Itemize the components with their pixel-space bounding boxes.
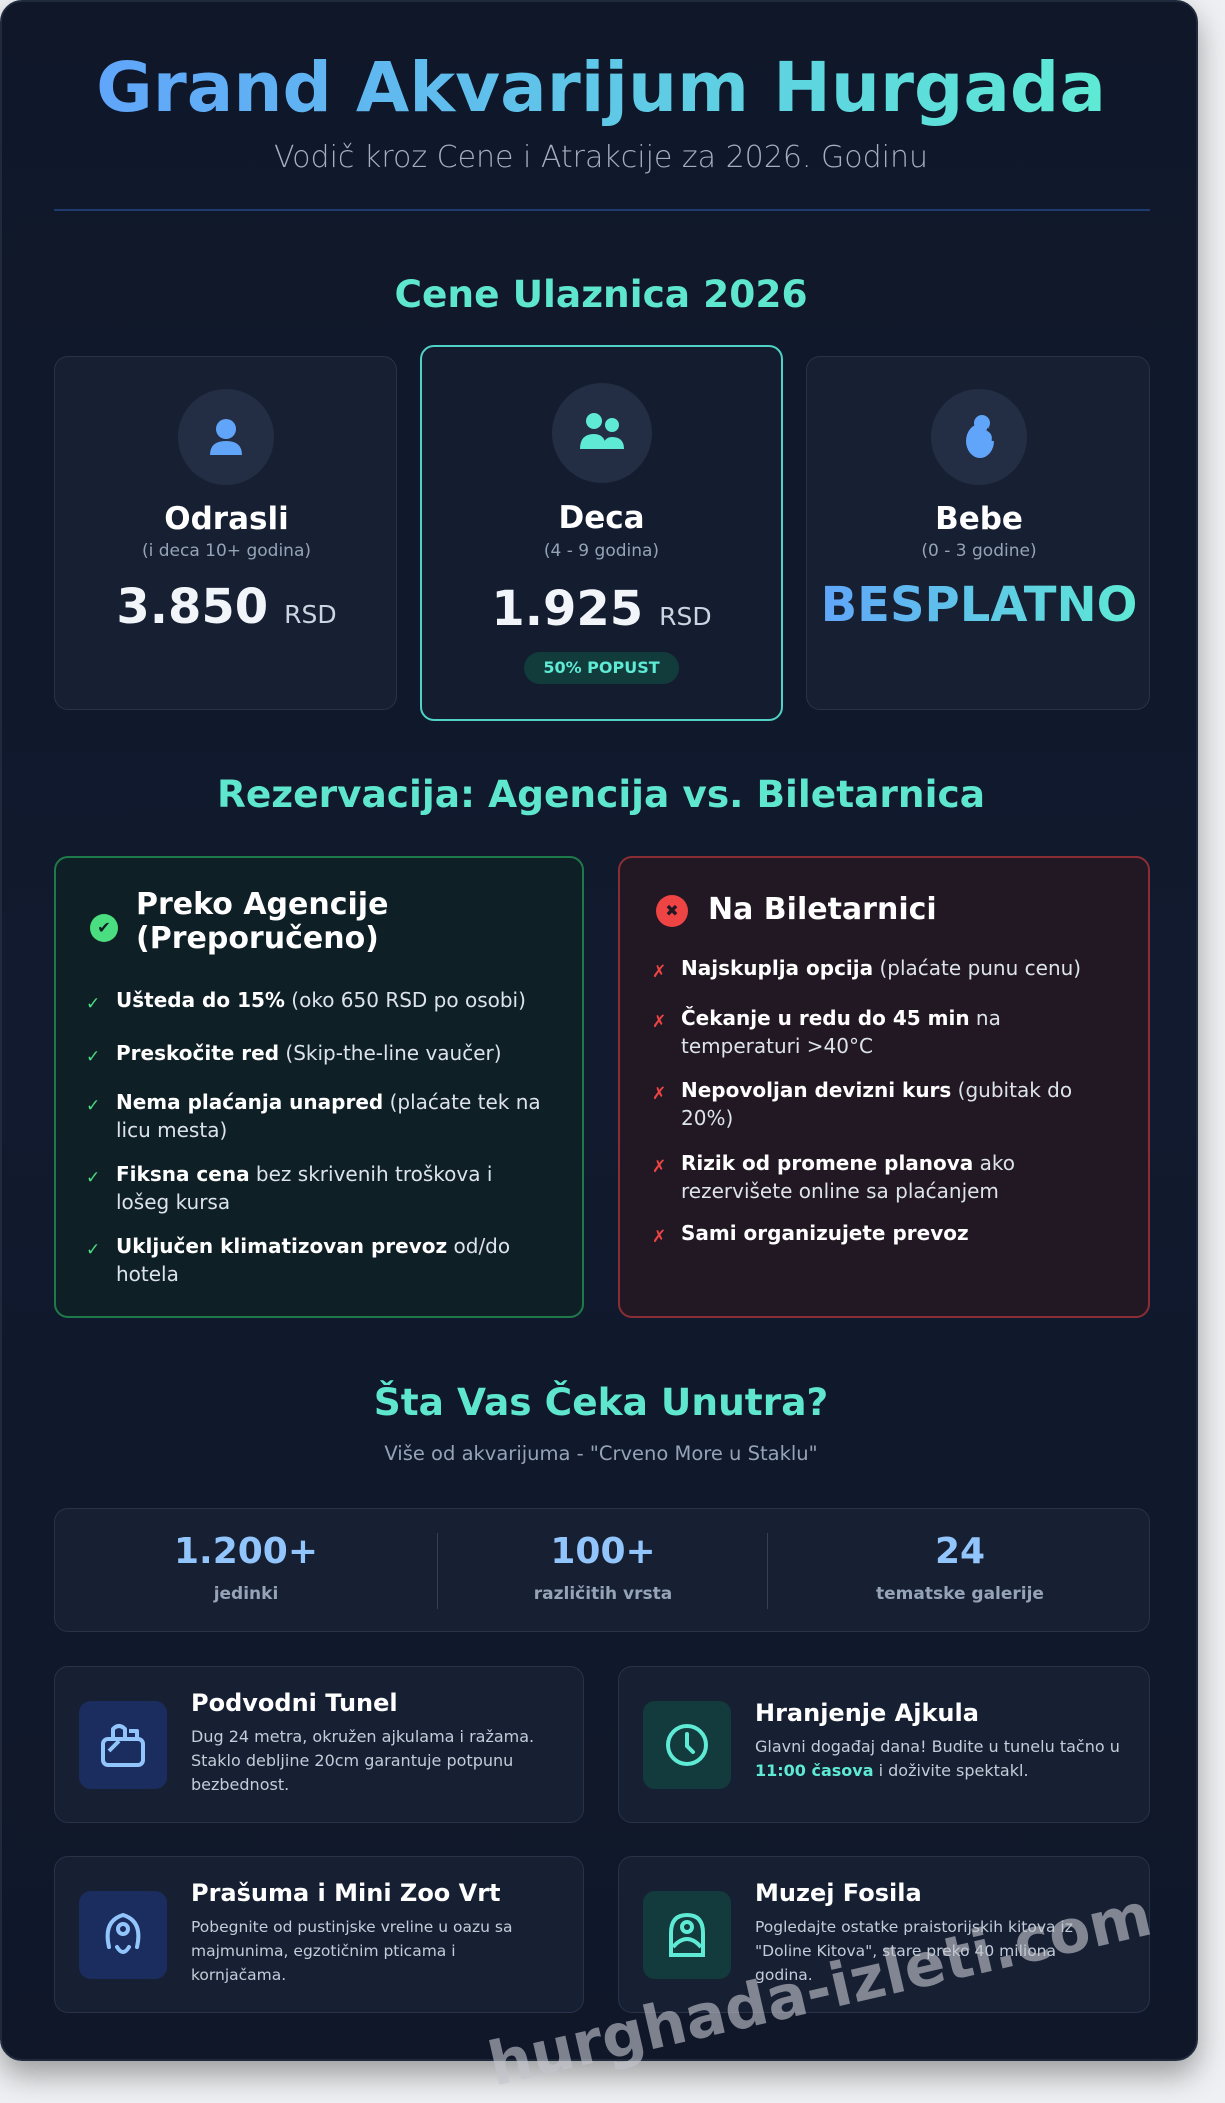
label: Bebe: Bebe xyxy=(935,501,1023,537)
panel: agency: Ušteda do 15% (oko 650 RSD po osobi) xyxy=(116,988,526,1012)
feature: fossil museum: Muzej Fosila xyxy=(755,1879,922,1907)
panel: agency: Fiksna cena bez skrivenih troškova i xyxy=(116,1162,492,1186)
panel: agency: hotela xyxy=(116,1262,179,1286)
icon: check circle xyxy=(90,914,118,942)
panel: agency xyxy=(54,856,584,1318)
icon: baby xyxy=(931,389,1027,485)
feature: fossil museum: "Doline Kitova", stare preko 40 miliona xyxy=(755,1942,1056,1960)
icon: x circle xyxy=(656,895,688,927)
stat: galleries: 24 xyxy=(935,1531,985,1572)
panel: agency: ✓ xyxy=(86,1096,100,1116)
icon: person xyxy=(178,389,274,485)
panel: agency: ✓ xyxy=(86,994,100,1014)
panel: agency: Uključen klimatizovan prevoz od/do xyxy=(116,1234,510,1258)
feature: tunnel: Dug 24 metra, okružen ajkulama i ražama. xyxy=(191,1727,534,1746)
panel: agency: ✓ xyxy=(86,1240,100,1260)
stats box xyxy=(54,1508,1150,1632)
card: adults: (i deca 10+ godina) xyxy=(142,541,311,561)
heading: agency xyxy=(136,887,388,956)
icon: two people xyxy=(552,383,652,483)
badge: 50% popust xyxy=(524,652,679,684)
panel: ticket office: ✗ xyxy=(652,1012,666,1032)
watermark: hurghada-izleti.com xyxy=(482,1880,1158,2100)
stat: individuals xyxy=(174,1531,318,1604)
feature: rainforest xyxy=(54,1856,584,2013)
panel: ticket office: temperaturi >40°C xyxy=(681,1034,873,1058)
panel: ticket office: ✗ xyxy=(652,1157,666,1177)
panel: agency: licu mesta) xyxy=(116,1118,227,1142)
panel: ticket office xyxy=(618,856,1150,1318)
feature: fossil museum xyxy=(618,1856,1150,2013)
feature: rainforest: Pobegnite od pustinjske vreline u oazu sa xyxy=(191,1918,512,1936)
panel: agency: ✓ xyxy=(86,1047,100,1067)
feature: shark feeding: Glavni događaj dana! Budite u tunelu tačno u xyxy=(755,1737,1120,1756)
stat: galleries xyxy=(876,1531,1044,1604)
icon: check circle: ✔ xyxy=(97,918,111,937)
heading: reservation: Rezervacija: Agencija vs. Biletarnica xyxy=(217,772,985,816)
feature: tunnel: Staklo debljine 20cm garantuje potpunu xyxy=(191,1751,513,1770)
label: Deca: Deca xyxy=(558,500,645,536)
feature: tunnel: bezbednost. xyxy=(191,1775,289,1794)
heading: agency: (Preporučeno) xyxy=(136,921,379,956)
label: Odrasli: Odrasli xyxy=(164,501,289,537)
feature: shark feeding: 11:00 časova i doživite spektakl. xyxy=(755,1761,1029,1780)
heading: ticket office: Na Biletarnici xyxy=(708,892,937,927)
stat: species xyxy=(534,1531,672,1604)
heading: agency: Preko Agencije xyxy=(136,887,388,922)
card: children xyxy=(420,345,783,721)
icon: x circle: ✖ xyxy=(665,901,679,920)
icon: clock xyxy=(643,1701,731,1789)
stat: galleries: tematske galerije xyxy=(876,1584,1044,1604)
feature: fossil museum: godina. xyxy=(755,1966,813,1984)
heading: inside: Šta Vas Čeka Unutra? xyxy=(374,1380,828,1424)
panel: agency: ✓ xyxy=(86,1168,100,1188)
panel: ticket office: ✗ xyxy=(652,1227,666,1247)
panel: agency: Preskočite red (Skip-the-line vaučer) xyxy=(116,1041,502,1065)
panel: ticket office: rezervišete online sa plaćanjem xyxy=(681,1179,999,1203)
card: babies xyxy=(806,356,1150,710)
icon: fossil xyxy=(643,1891,731,1979)
price: children: 1.925 RSD xyxy=(491,581,712,637)
panel: ticket office: Rizik od promene planova ako xyxy=(681,1151,1015,1175)
panel: ticket office: Sami organizujete prevoz xyxy=(681,1221,969,1245)
feature: rainforest: majmunima, egzotičnim pticama i xyxy=(191,1942,456,1960)
feature: tunnel xyxy=(54,1666,584,1823)
price: free: BESPLATNO xyxy=(821,577,1137,633)
feature: shark feeding xyxy=(618,1666,1150,1823)
card: children: (4 - 9 godina) xyxy=(544,541,659,561)
stat: individuals: 1.200+ xyxy=(174,1531,318,1572)
stat: species: 100+ xyxy=(550,1531,656,1572)
list: ticket office cons xyxy=(652,956,1081,1247)
heading: prices: Cene Ulaznica 2026 xyxy=(394,272,808,316)
title: Grand Akvarijum Hurgada xyxy=(96,48,1106,128)
feature: fossil museum: Pogledajte ostatke praistorijskih kitova iz xyxy=(755,1918,1073,1936)
panel: ticket office: ✗ xyxy=(652,1084,666,1104)
stat: individuals: jedinki xyxy=(214,1584,278,1604)
panel: agency: Nema plaćanja unapred (plaćate tek na xyxy=(116,1090,541,1114)
badge: 50% popust: 50% POPUST xyxy=(543,658,660,677)
list: agency pros xyxy=(86,988,541,1286)
icon: tunnel xyxy=(79,1701,167,1789)
panel: ticket office: Čekanje u redu do 45 min na xyxy=(681,1006,1001,1030)
feature: tunnel: Podvodni Tunel xyxy=(191,1689,398,1717)
feature: rainforest: Prašuma i Mini Zoo Vrt xyxy=(191,1879,501,1907)
feature: shark feeding: Hranjenje Ajkula xyxy=(755,1699,979,1727)
panel: ticket office: ✗ xyxy=(652,962,666,982)
subheading: Više od akvarijuma - "Crveno More u Staklu" xyxy=(384,1442,818,1465)
feature: rainforest: kornjačama. xyxy=(191,1966,286,1984)
panel: agency: lošeg kursa xyxy=(116,1190,230,1214)
panel: ticket office: Najskuplja opcija (plaćate punu cenu) xyxy=(681,956,1081,980)
card: babies: (0 - 3 godine) xyxy=(921,541,1037,561)
price: adults: 3.850 RSD xyxy=(116,579,337,635)
panel: ticket office: 20%) xyxy=(681,1106,733,1130)
subtitle: Vodič kroz Cene i Atrakcije za 2026. Godinu xyxy=(274,140,928,175)
card: adults xyxy=(54,356,397,710)
panel: ticket office: Nepovoljan devizni kurs (gubitak do xyxy=(681,1078,1072,1102)
icon: monkey xyxy=(79,1891,167,1979)
stat: species: različitih vrsta xyxy=(534,1584,672,1604)
